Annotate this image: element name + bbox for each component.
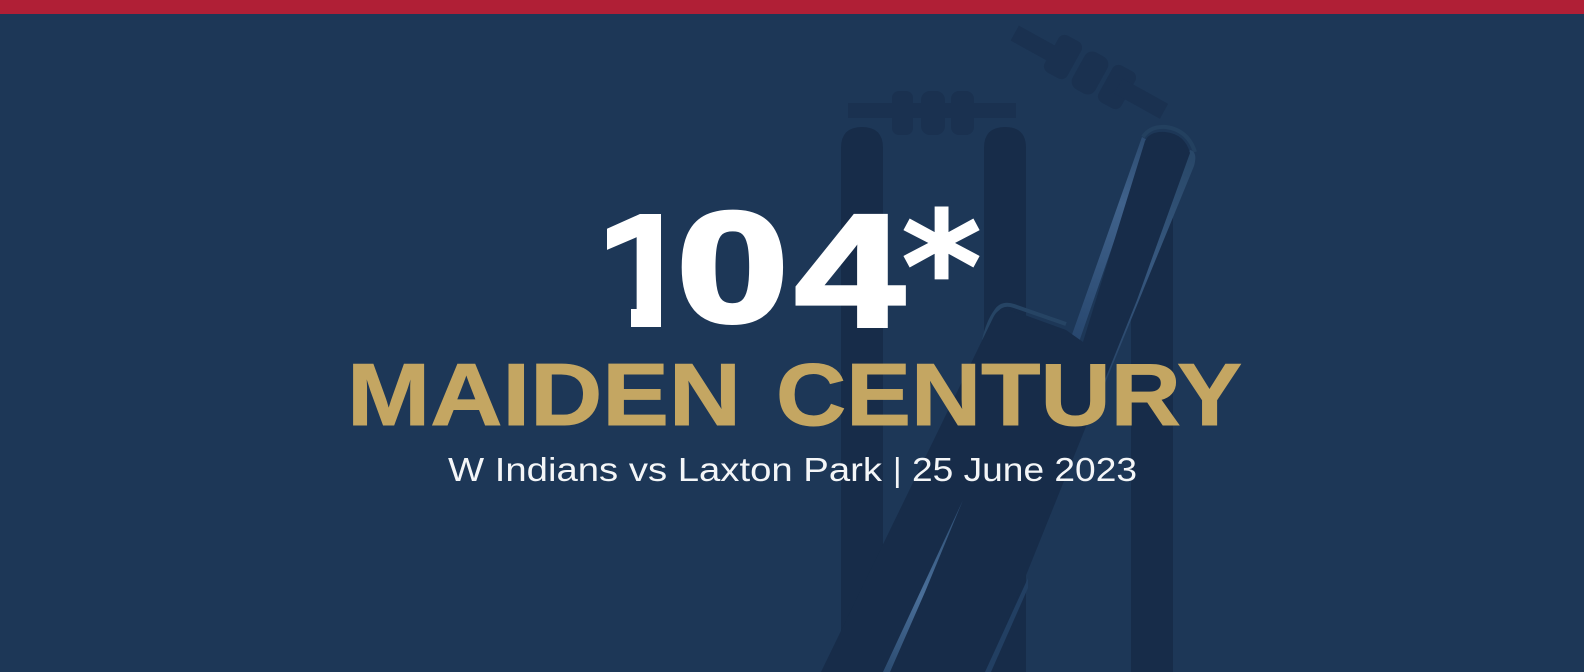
headline: 104*: 1 [584,180,715,362]
flying bail [1011,26,1168,119]
subtitle: match and date: W Indians vs Laxton Park [448,451,883,488]
tilted stump top outline [1143,127,1195,152]
headline: 104*: 4 [795,182,904,361]
heading: maiden century [347,345,1242,444]
tilted stump right highlight [1086,150,1195,420]
bat and tilted stump body [821,132,1190,672]
headline: 104* [607,206,980,328]
bat edge streak [883,500,963,672]
top red band [0,0,1584,14]
headline: 104*: * [901,178,982,359]
bat shoulder outline [984,305,1066,340]
resting bail [848,91,1016,135]
icon: cricket stumps and bat watermark [821,26,1195,672]
heading: maiden century: CENTURY [776,345,1242,444]
subtitle: match and date: 25 June 2023 [912,451,1137,488]
middle stump [984,127,1026,672]
left stump [841,127,883,672]
bat outer edge highlight [985,578,1028,672]
tilted stump left highlight [1063,137,1149,362]
headline: 104*: 0 [677,180,788,354]
subtitle: match and date: | [893,451,902,488]
heading: maiden century: MAIDEN [347,345,741,444]
right stump [1131,215,1173,672]
subtitle: match and date [448,451,1137,488]
